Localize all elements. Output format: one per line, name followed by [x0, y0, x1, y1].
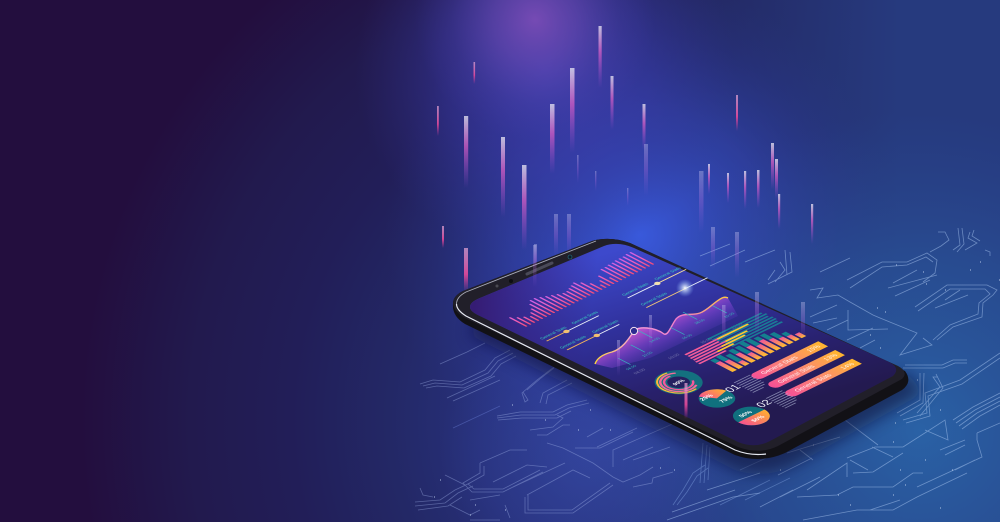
pie chart 02 — [725, 403, 778, 429]
phone edge highlight — [456, 304, 766, 454]
phone bezel — [453, 239, 905, 451]
axis time labels: 04:00 — [632, 368, 647, 375]
slider: left top: General Stats — [570, 310, 600, 325]
chart tick lines and labels: 14:00 — [648, 336, 662, 343]
phone screen — [470, 244, 896, 445]
pie chart 01: 25% — [699, 394, 716, 402]
slider: left bottom — [558, 319, 625, 352]
slider: left top — [539, 310, 605, 343]
chart tick lines and labels: 16:00 — [680, 333, 694, 340]
area chart — [595, 297, 738, 368]
donut chart: 90% — [672, 379, 687, 386]
circuit traces, left — [415, 343, 677, 520]
dashboard on phone screen — [498, 245, 879, 438]
slider: left bottom: General Stats — [558, 335, 588, 349]
phone shadow — [470, 310, 925, 474]
speaker — [527, 263, 552, 274]
label 01: 01 — [722, 383, 744, 394]
light rays over phone — [533, 245, 805, 419]
chart tick lines and labels: 04:00 — [624, 364, 638, 371]
stat pill 2: General Stats — [776, 364, 817, 384]
axis time labels: 15:00 — [699, 337, 714, 344]
circuit solder pads — [434, 262, 1000, 515]
chart tick lines and labels — [593, 298, 741, 371]
description lines 02 — [766, 391, 801, 408]
pie chart 02: 50% — [738, 410, 755, 419]
glowing slider thumb — [676, 279, 694, 297]
pie chart 01: 75% — [719, 396, 735, 404]
stat pill 1: General Stats — [759, 355, 800, 376]
light rays behind phone — [437, 26, 813, 292]
front cameras — [496, 255, 572, 288]
axis time labels: 22:00 — [729, 322, 744, 329]
axis time labels: 10:00 — [666, 353, 681, 360]
slider: right top: General Stats — [621, 282, 650, 297]
stat pill 3: 14% — [839, 362, 857, 371]
label 02: 02 — [754, 398, 775, 409]
screen tint — [470, 244, 896, 445]
slider: right top — [621, 266, 688, 299]
stat pill 3 — [782, 359, 862, 398]
stat pill 2 — [765, 350, 845, 389]
circuit traces, right — [667, 228, 1000, 520]
axis time labels — [632, 321, 744, 376]
slider: left bottom: General Stats — [591, 319, 620, 334]
stat pill 3: General Stats — [793, 373, 834, 393]
horizontal bar chart — [679, 312, 784, 364]
description lines 01 — [734, 375, 769, 393]
phone body — [453, 239, 908, 459]
chart tick lines and labels: 20:00 — [722, 311, 736, 318]
phone top edge highlight — [456, 241, 596, 304]
column bar chart — [708, 323, 806, 372]
bar chart: pink spectrum — [503, 252, 653, 326]
slider: right bottom — [639, 274, 708, 308]
pie chart 02: 50% — [751, 415, 767, 423]
pie chart 01 — [691, 385, 743, 411]
slider: left top: General Stats — [539, 326, 568, 340]
stat pill 2: 13% — [822, 353, 840, 362]
circuit traces, vertical bus — [673, 443, 790, 505]
slider: right bottom: General Stats — [639, 292, 669, 306]
slider: right top: General Stats — [653, 266, 683, 281]
chart tick lines and labels: 10:00 — [640, 351, 655, 358]
stat pill 1: 15% — [805, 344, 823, 353]
chart tick lines and labels: 18:00 — [693, 318, 707, 325]
stat pill 1 — [749, 341, 828, 380]
smartphone — [453, 239, 908, 459]
donut chart — [643, 364, 714, 400]
